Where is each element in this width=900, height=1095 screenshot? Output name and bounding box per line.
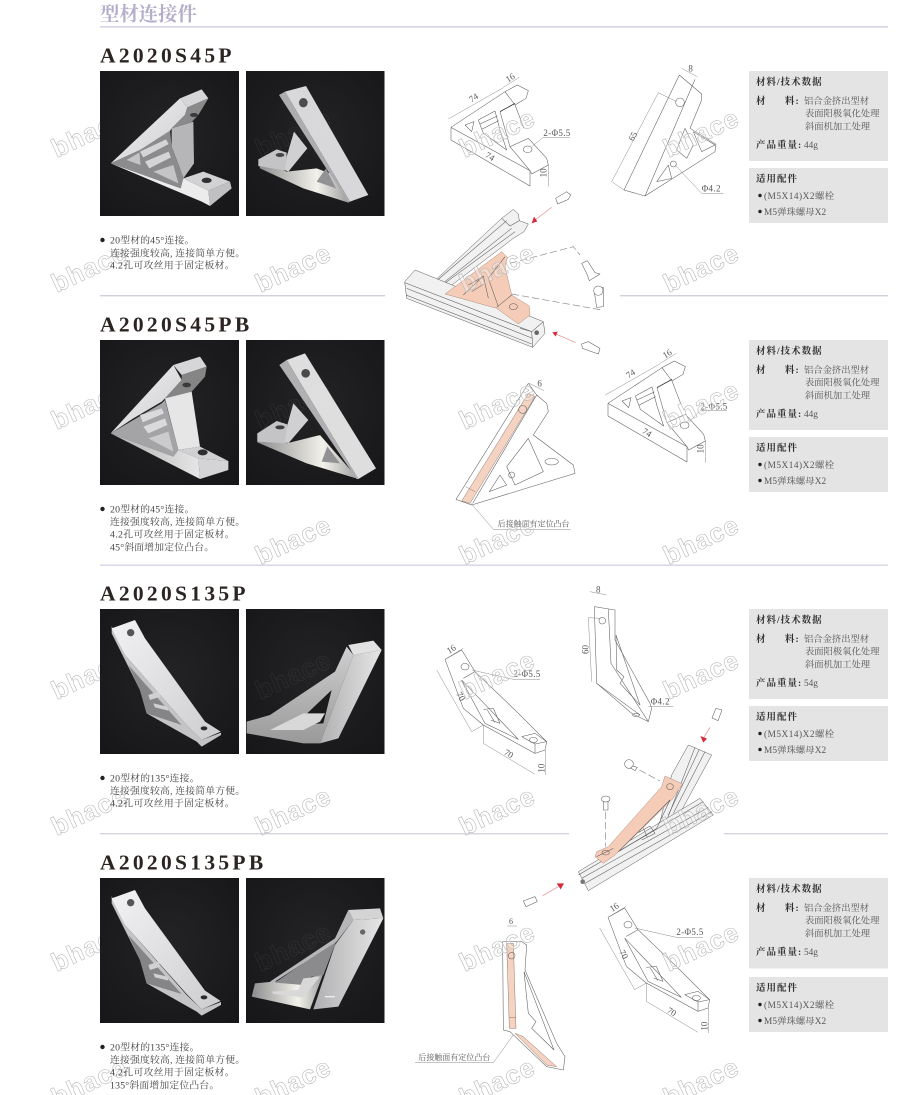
panel: material data: 料: (785, 902, 800, 914)
photo: rear view of 135 degree bracket (246, 609, 384, 754)
diagram: blade dimensions: Φ4.2 (702, 183, 721, 193)
panel: accessories (749, 168, 888, 223)
watermarks: left column behind photos: bhace (47, 916, 132, 977)
section: A2020S45PB (100, 313, 888, 566)
diagram: blade with boss: 6 (537, 379, 542, 389)
photo: rear view of 45 degree bracket with boss (246, 340, 384, 485)
panel: accessories: 适用配件 (756, 982, 798, 994)
panel: material data (749, 609, 888, 699)
panel: material data: 材料/技术数据 (756, 76, 823, 88)
diagram: isometric dimensions: 74 (467, 91, 480, 104)
watermarks: left column behind photos: bhace (47, 644, 132, 705)
photo: front view of 45 degree bracket with boss (100, 340, 239, 485)
heading: A2020S135PB: A2020S135PB (100, 851, 267, 875)
diagram: blade dimensions: 60 (580, 645, 590, 654)
text block: features (100, 502, 245, 554)
panel: material data: 表面阳极氧化处理 (805, 376, 880, 388)
pink bracket (445, 252, 530, 324)
text block: features: 20型材的45°连接。 (110, 502, 194, 516)
watermarks: left column behind photos: bhace (47, 374, 132, 435)
icon: bolts (582, 261, 603, 307)
diagram: isometric dimensions: 10 (699, 1021, 709, 1031)
diagram: isometric dimensions: 74 (484, 150, 497, 163)
upper profile (427, 209, 528, 294)
section: A2020S135PB (100, 851, 888, 1092)
watermarks: overlay: bhace (455, 509, 540, 570)
panel: material data: 材 (756, 364, 767, 376)
text block: features: 4.2孔可攻丝用于固定板材。 (110, 258, 235, 272)
icon: t-nut lower (582, 342, 600, 354)
watermarks: overlay: bhace (455, 237, 540, 298)
panel: material data: 材 (756, 95, 767, 107)
diagram: blade dimensions (580, 585, 673, 722)
icon: red arrow to t-nut (543, 883, 564, 896)
panel: material data: 料: (785, 364, 800, 376)
lower profile (405, 270, 545, 347)
panel: material data: 斜面机加工处理 (805, 120, 871, 132)
panel: accessories: M5弹珠螺母X2 (764, 1015, 827, 1027)
diagram: blade with boss: 后接触面有定位凸台 (498, 519, 570, 529)
pink bracket (595, 776, 683, 863)
diagram: blade with boss: 6 (509, 917, 513, 926)
section: A2020S45P (100, 44, 888, 354)
panel: accessories (749, 977, 888, 1032)
panel: accessories: (M5X14)X2螺栓 (764, 728, 835, 740)
panel: accessories: (M5X14)X2螺栓 (764, 459, 835, 471)
panel: material data: 斜面机加工处理 (805, 390, 871, 402)
panel: material data: 表面阳极氧化处理 (805, 108, 880, 120)
diagram: isometric dimensions: 70 (665, 1005, 679, 1018)
watermarks: left column behind photos: bhace (47, 780, 132, 841)
text block: features: 连接强度较高, 连接简单方便。 (110, 246, 245, 260)
panel: material data: 44g (804, 410, 818, 420)
panel: material data: 产品重量: (756, 677, 802, 689)
text block: features: 45°斜面增加定位凸台。 (110, 540, 214, 554)
text block: features (100, 772, 245, 810)
section: A2020S135P (100, 582, 888, 891)
diagram: isometric dimensions: 2-Φ5.5 (676, 927, 704, 937)
text block: features (100, 1040, 245, 1092)
watermarks: overlay: bhace (251, 780, 336, 841)
watermarks: overlay: bhace (455, 102, 540, 163)
diagram: isometric dimensions: 2-Φ5.5 (700, 401, 728, 411)
icon: screw (601, 796, 610, 810)
watermarks: left column behind photos (47, 102, 132, 1095)
diagram: isometric dimensions: 2-Φ5.5 (513, 669, 541, 679)
panel: material data: 铝合金挤出型材 (804, 364, 869, 376)
panel: material data: 铝合金挤出型材 (804, 902, 869, 914)
diagram: blade dimensions: Φ4.2 (651, 697, 670, 707)
heading: A2020S135P: A2020S135P (100, 582, 249, 606)
title: 型材连接件 (100, 4, 198, 26)
panel: material data: 铝合金挤出型材 (804, 95, 869, 107)
panel: material data: 表面阳极氧化处理 (805, 914, 880, 926)
diagram: isometric dimensions: 10 (696, 444, 706, 453)
diagram: isometric dimensions: 16 (608, 900, 621, 914)
watermarks: overlay: bhace (251, 916, 336, 977)
watermarks: left column behind photos: bhace (47, 102, 132, 163)
diagram: isometric dimensions (605, 347, 728, 463)
icon: bolt with circle head (625, 760, 637, 771)
heading: A2020S45PB: A2020S45PB (100, 313, 252, 337)
watermarks: overlay: bhace (251, 237, 336, 298)
heading: A2020S45P: A2020S45P (100, 44, 235, 68)
panel: material data: 料: (785, 95, 800, 107)
diagram: isometric dimensions: 74 (624, 367, 637, 380)
watermarks: overlay: bhace (659, 644, 744, 705)
divider (100, 564, 888, 566)
watermarks: overlay: bhace (659, 102, 744, 163)
watermarks: overlay: bhace (659, 237, 744, 298)
diagram: isometric dimensions: 10 (536, 763, 546, 773)
diagram: isometric dimensions: 70 (454, 690, 468, 703)
text block: features: 4.2孔可攻丝用于固定板材。 (110, 528, 235, 540)
text block: features: 4.2孔可攻丝用于固定板材。 (110, 796, 235, 810)
icon: red arrow lower (552, 332, 576, 343)
panel: material data: 斜面机加工处理 (805, 658, 871, 670)
text block: features: 20型材的135°连接。 (110, 1040, 200, 1054)
photo: rear view of 45 degree bracket (246, 71, 384, 216)
diagram: assembly exploded view (578, 708, 722, 891)
panel: material data: 材 (756, 902, 767, 914)
text block: features: 4.2孔可攻丝用于固定板材。 (110, 1066, 235, 1078)
panel: accessories: M5弹珠螺母X2 (764, 744, 827, 756)
base profile (578, 798, 713, 891)
diagram: isometric dimensions (448, 71, 571, 187)
panel: material data: 54g (804, 679, 818, 689)
diagram: blade dimensions: 8 (596, 585, 601, 595)
panel: material data: 材料/技术数据 (756, 883, 823, 895)
diagram: isometric dimensions: 10 (539, 168, 549, 177)
diagram: blade dimensions: 8 (688, 64, 693, 74)
diagram: blade dimensions: 65 (626, 130, 640, 143)
watermarks: overlay: bhace (659, 780, 744, 841)
watermarks: overlay: bhace (455, 916, 540, 977)
panel: material data (749, 71, 888, 161)
diagram: blade with boss: 后接触面有定位凸台 (418, 1052, 490, 1062)
icon: red arrow (700, 727, 710, 743)
diagram: blade dimensions (612, 64, 723, 196)
panel: material data: 产品重量: (756, 946, 802, 958)
icon: t-nut upper (556, 192, 571, 204)
divider (100, 295, 888, 296)
panel: accessories: 适用配件 (756, 173, 798, 185)
text block: features: 连接强度较高, 连接简单方便。 (110, 1053, 245, 1066)
panel: material data: 材 (756, 633, 767, 645)
panel: material data (749, 340, 888, 430)
panel: accessories (749, 706, 888, 761)
watermarks: overlay: bhace (659, 374, 744, 435)
photo: rear view of 135 degree bracket with boss (246, 878, 384, 1023)
panel: material data: 材料/技术数据 (756, 345, 823, 357)
text block: features: 20型材的45°连接。 (110, 234, 194, 246)
watermarks: overlay: bhace (659, 509, 744, 570)
text block: features: 135°斜面增加定位凸台。 (110, 1078, 219, 1092)
watermarks: overlay: bhace (455, 780, 540, 841)
diagram: assembly exploded view (405, 192, 603, 354)
photo: front view of 135 degree bracket with boss (100, 878, 239, 1023)
panel: accessories: (M5X14)X2螺栓 (764, 190, 835, 202)
diagram: isometric dimensions: 70 (502, 747, 516, 760)
watermarks: overlay (251, 102, 744, 1095)
panel: material data: 44g (804, 141, 818, 151)
diagram: isometric dimensions: 70 (617, 948, 631, 961)
icon: t-nut (523, 897, 537, 907)
watermarks: overlay: bhace (251, 374, 336, 435)
diagram: isometric dimensions (600, 900, 710, 1033)
photo: front view of 45 degree bracket (100, 71, 239, 216)
watermarks: overlay: bhace (251, 509, 336, 570)
panel: material data: 铝合金挤出型材 (804, 633, 869, 645)
diagram: isometric dimensions: 2-Φ5.5 (543, 128, 571, 138)
diagram: isometric dimensions: 16 (661, 347, 674, 360)
panel: accessories: (M5X14)X2螺栓 (764, 999, 835, 1011)
diagram: isometric dimensions: 16 (504, 71, 517, 84)
icon: red arrow upper (532, 207, 552, 223)
diagram: isometric dimensions: 16 (445, 642, 458, 656)
watermarks: overlay: bhace (251, 102, 336, 163)
panel: material data: 54g (804, 948, 818, 958)
text block: features (100, 234, 245, 272)
text block: features: 20型材的135°连接。 (110, 772, 200, 784)
watermarks: overlay: bhace (455, 644, 540, 705)
watermarks: overlay: bhace (455, 374, 540, 435)
panel: accessories: M5弹珠螺母X2 (764, 206, 827, 218)
diagram: isometric dimensions (437, 642, 547, 775)
upright profile (657, 745, 712, 835)
diagram: isometric dimensions: 74 (641, 426, 654, 439)
icon: t-nut (712, 708, 722, 721)
watermarks: overlay: bhace (659, 916, 744, 977)
panel: accessories (749, 437, 888, 492)
panel: material data: 斜面机加工处理 (805, 928, 871, 940)
diagram: blade with boss (415, 917, 565, 1070)
photo: front view of 135 degree bracket (100, 609, 239, 754)
panel: material data: 产品重量: (756, 139, 802, 151)
panel: material data (749, 878, 888, 968)
panel: material data: 材料/技术数据 (756, 614, 823, 626)
panel: material data: 表面阳极氧化处理 (805, 646, 880, 658)
panel: accessories: M5弹珠螺母X2 (764, 475, 827, 487)
panel: material data: 料: (785, 633, 800, 645)
divider (100, 833, 888, 834)
watermarks: left column behind photos: bhace (47, 237, 132, 298)
panel: accessories: 适用配件 (756, 711, 798, 723)
watermarks: overlay: bhace (251, 644, 336, 705)
text block: features: 连接强度较高, 连接简单方便。 (110, 784, 245, 797)
diagram: blade with boss (456, 379, 575, 529)
panel: accessories: 适用配件 (756, 442, 798, 454)
text block: features: 连接强度较高, 连接简单方便。 (110, 515, 245, 528)
panel: material data: 产品重量: (756, 408, 802, 420)
